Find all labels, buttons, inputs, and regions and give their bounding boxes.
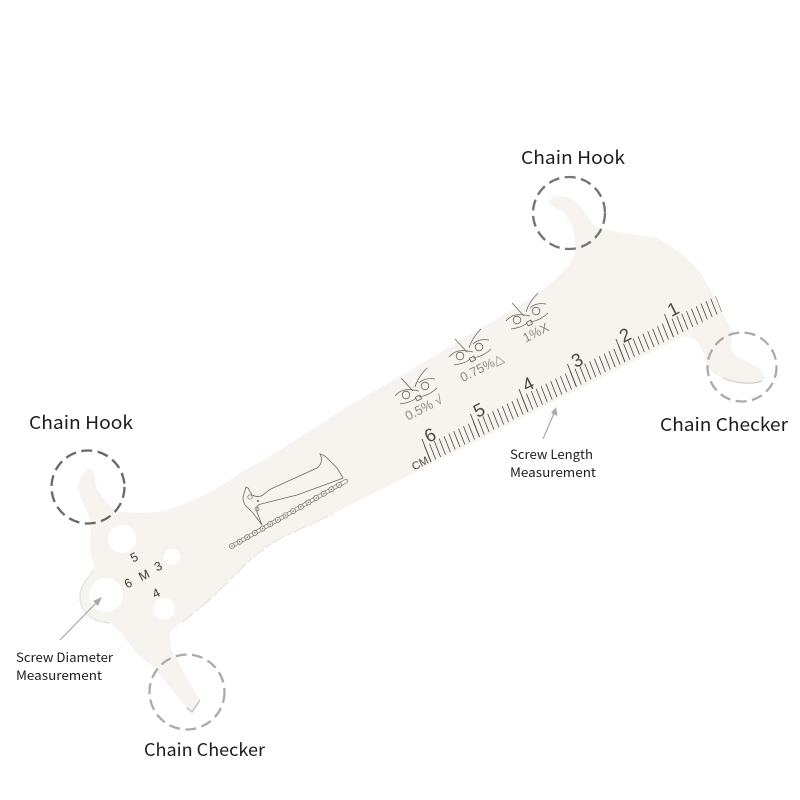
heading: top chain hook label: Chain Hook (521, 144, 625, 170)
text block: screw length measurement: Measurement (510, 462, 596, 481)
tool body: chain checker with hooks and holes (78, 196, 765, 712)
arrow: to large hole (60, 597, 102, 640)
callout circle: top chain hook (533, 177, 605, 249)
ruler numbers: 4 (519, 372, 537, 396)
screw diameter hole numbers: 3 (152, 559, 165, 574)
icon: 0.75% wear: 0.75%△ (457, 350, 506, 385)
text block: screw length measurement: Screw Length (510, 444, 593, 463)
ruler numbers: 2 (616, 323, 634, 347)
callout circle: left chain hook (52, 450, 124, 524)
screw diameter hole numbers: 4 (150, 586, 163, 601)
screw diameter hole numbers: 6 (122, 576, 135, 591)
ruler numbers: 3 (568, 348, 586, 372)
ruler numbers: CM (410, 455, 431, 473)
ruler numbers: 5 (470, 398, 488, 422)
chain wear gauge icons (395, 293, 552, 423)
text block: screw diameter measurement: Screw Diameter (16, 647, 113, 666)
ruler numbers: 6 (421, 423, 439, 447)
callout circle: right chain checker (708, 332, 776, 402)
heading: left chain hook label: Chain Hook (29, 409, 133, 435)
icon: 1% wear: 1%X (520, 319, 552, 345)
icon: 0.5% wear: 0.5% √ (402, 391, 446, 423)
heading: bottom chain checker label: Chain Checker (144, 737, 265, 762)
ruler numbers (410, 297, 682, 473)
icon: chain tool engraving with chain (232, 454, 346, 546)
text block: screw length measurement (510, 444, 596, 481)
callout circle: bottom chain checker (150, 654, 224, 730)
screw diameter hole numbers: 5 (128, 550, 141, 565)
text block: screw diameter measurement (16, 647, 113, 684)
heading: right chain checker label: Chain Checker (660, 411, 789, 437)
arrow: to ruler edge (543, 407, 558, 439)
ruler major ticks (422, 314, 674, 462)
text block: screw diameter measurement: Measurement (16, 665, 102, 684)
ruler minor ticks (427, 304, 719, 454)
ruler: screw length scale (410, 297, 719, 473)
icon: 0.5% wear (395, 368, 446, 423)
icon: 0.75% wear (449, 329, 506, 385)
icon: 1% wear (506, 293, 552, 345)
screw diameter hole numbers: M (136, 567, 152, 584)
ruler numbers: 1 (664, 297, 682, 321)
screw diameter hole numbers (122, 550, 165, 601)
